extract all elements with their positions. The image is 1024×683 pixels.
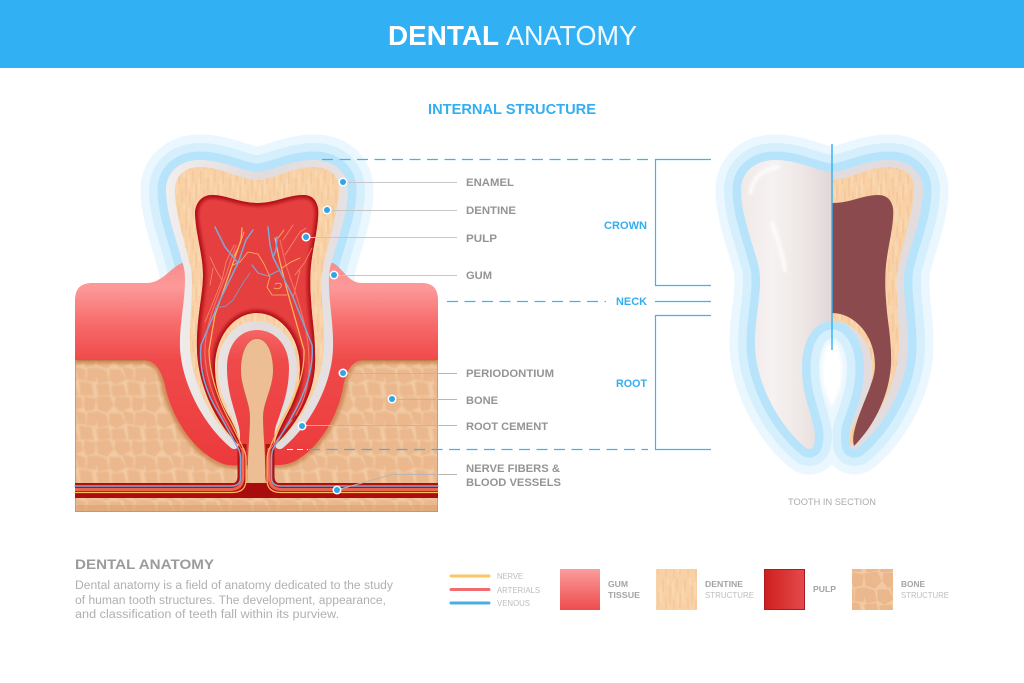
callout: pulp [302, 232, 497, 245]
legend: gum tissue: GUM [608, 579, 628, 589]
callout: bone: BONE [466, 395, 498, 407]
section axis line [831, 144, 833, 350]
legend: bone structure: STRUCTURE [901, 590, 949, 600]
callout: pulp: PULP [466, 233, 497, 245]
callout: bone [388, 394, 498, 407]
legend: dentine structure [656, 569, 754, 610]
title: DENTAL [388, 20, 499, 51]
callout: root cement [298, 421, 548, 433]
legend: line types: VENOUS [497, 598, 530, 608]
dentine [175, 167, 339, 446]
callout: dentine [322, 205, 516, 217]
zone label: root: ROOT [616, 378, 647, 390]
legend: line types [451, 571, 540, 608]
callout: nerve fibers and blood vessels: NERVE FIBERS & [466, 463, 560, 475]
legend: gum tissue [560, 569, 640, 610]
description text: of human tooth structures. The development, appearance, [75, 595, 386, 607]
legend: dentine structure: STRUCTURE [705, 590, 754, 600]
right illustration: tooth in section [741, 160, 923, 449]
header banner [0, 0, 1024, 68]
enamel [166, 160, 348, 449]
interradicular bone [241, 339, 273, 483]
callout: gum: GUM [466, 270, 492, 282]
legend: dentine structure: DENTINE [705, 579, 743, 589]
description text [75, 580, 393, 621]
nerve branches [233, 230, 300, 295]
description text: and classification of teeth fall within its purview. [75, 609, 339, 621]
caption: tooth in section: TOOTH IN SECTION [788, 497, 876, 508]
legend: bone structure: BONE [901, 579, 925, 589]
veins [75, 227, 438, 486]
callout: enamel [338, 177, 514, 189]
callout: dentine: DENTINE [466, 205, 516, 217]
legend: line types: ARTERIALS [497, 585, 540, 595]
gum shadow on bone [75, 360, 438, 465]
arterial branches [205, 225, 312, 480]
crown halo [166, 160, 348, 449]
nerve [75, 228, 438, 492]
legend: gum tissue: TISSUE [608, 590, 640, 600]
legend: pulp: PULP [813, 584, 836, 594]
description heading: DENTAL ANATOMY [75, 556, 215, 572]
halo [741, 160, 923, 449]
callout: gum [330, 270, 492, 282]
dashed white neck mark [287, 448, 308, 450]
title: ANATOMY [506, 20, 637, 51]
description block [75, 556, 393, 621]
callout: enamel: ENAMEL [466, 177, 514, 189]
description text: Dental anatomy is a field of anatomy dedicated to the study [75, 580, 393, 592]
arch opening [822, 343, 842, 408]
bone block [70, 355, 443, 517]
zone label: neck: NECK [616, 296, 647, 308]
section half [832, 160, 923, 450]
callout: nerve fibers and blood vessels [332, 463, 561, 494]
callout: periodontium: PERIODONTIUM [466, 368, 554, 380]
callout: periodontium [338, 368, 554, 380]
vessels [75, 225, 438, 492]
heading: internal structure: INTERNAL STRUCTURE [428, 102, 596, 118]
canal bands [75, 444, 438, 498]
legend: pulp [764, 570, 836, 610]
legend: bone structure [852, 569, 949, 610]
pulp [195, 195, 318, 446]
zone label: crown: CROWN [604, 220, 647, 232]
zone markers [309, 160, 711, 450]
callout: nerve fibers and blood vessels: BLOOD VESSELS [466, 477, 561, 489]
callout: root cement: ROOT CEMENT [466, 421, 548, 433]
left illustration: tooth in gum and bone [70, 160, 443, 517]
gum tissue [75, 263, 438, 465]
legend: line types: NERVE [497, 571, 523, 581]
enamel half: outside view [741, 160, 832, 450]
